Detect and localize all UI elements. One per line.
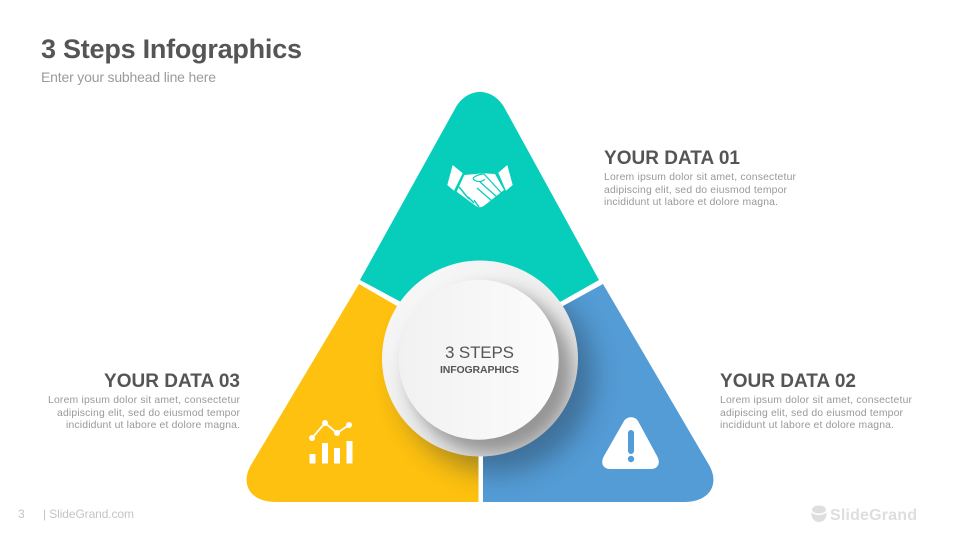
text block: data 01: adipiscing elit, sed do eiusmod tempor (604, 185, 788, 196)
subhead: Enter your subhead line here (41, 69, 216, 85)
text block: data 01: Lorem ipsum dolor sit amet, consectetur (604, 172, 797, 183)
center sublabel: INFOGRAPHICS (440, 364, 519, 376)
text block: data 03: YOUR DATA 03 (104, 371, 240, 392)
center label: 3 STEPS (445, 343, 514, 362)
text block: data 02: Lorem ipsum dolor sit amet, consectetur (720, 395, 913, 406)
chart line (312, 423, 349, 438)
icon: warning (602, 417, 659, 469)
triangle diagram (247, 92, 713, 502)
text block: data 03 (48, 371, 241, 431)
icon: handshake (447, 165, 513, 207)
segment: yellow bottom left (247, 284, 478, 502)
center circle (382, 260, 578, 456)
footer page number: 3 (18, 507, 25, 521)
outer disc (382, 260, 578, 456)
text block: data 01: YOUR DATA 01 (604, 148, 740, 169)
title: 3 Steps Infographics (41, 34, 302, 64)
icon: chart (309, 420, 352, 464)
text block: data 03: incididunt ut labore et dolore magna. (66, 420, 240, 431)
text block: data 03: Lorem ipsum dolor sit amet, consectetur (48, 395, 241, 406)
inner disc shadow (408, 289, 572, 453)
chart bars (310, 441, 352, 464)
text block: data 02: incididunt ut labore et dolore magna. (720, 420, 894, 431)
icon: logo mark (811, 506, 827, 522)
text block: data 02 (720, 371, 913, 431)
footer site label: | SlideGrand.com (43, 507, 134, 521)
logo wordmark: SlideGrand (830, 507, 917, 524)
text block: data 03: adipiscing elit, sed do eiusmod tempor (57, 408, 241, 419)
text block: data 02: adipiscing elit, sed do eiusmod tempor (720, 408, 904, 419)
segment: blue bottom right (483, 284, 713, 502)
footer logo (811, 506, 917, 524)
inner disc (399, 280, 559, 440)
segment: teal top (360, 92, 599, 302)
text block: data 01: incididunt ut labore et dolore magna. (604, 197, 778, 208)
text block: data 02: YOUR DATA 02 (720, 371, 856, 392)
circle cast shadow (400, 279, 594, 473)
text block: data 01 (604, 148, 797, 208)
